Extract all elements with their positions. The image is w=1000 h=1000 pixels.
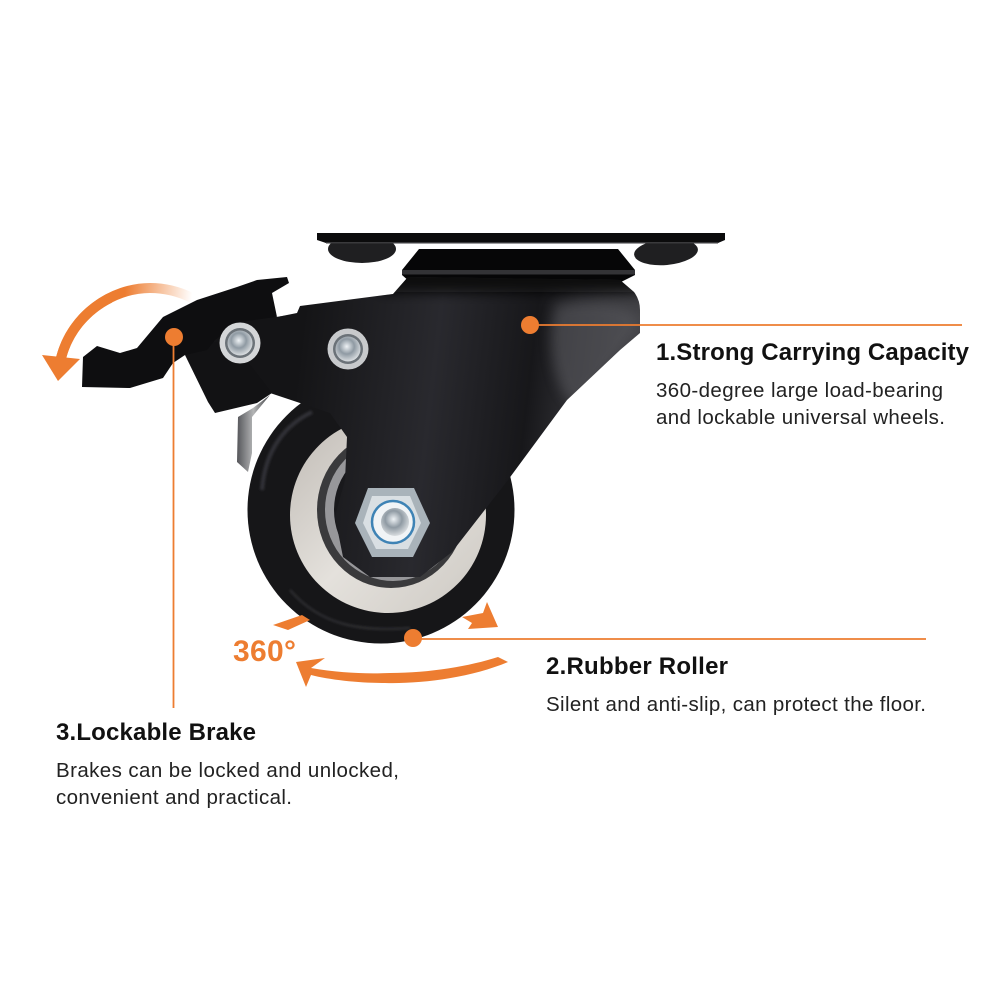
text block 3: Brakes can be locked and unlocked,: [56, 759, 399, 782]
fork highlight: [551, 302, 640, 405]
callout line 2: [404, 629, 926, 647]
arrow: swivel upper right: [462, 602, 498, 629]
arrow: brake swing: [42, 288, 192, 381]
mounting plate: [317, 233, 725, 268]
rivet left: [220, 322, 260, 364]
text block 1: [656, 339, 970, 429]
rubber wheel: [248, 376, 514, 644]
brake lever: [82, 277, 290, 388]
text block 2: 2.Rubber Roller: [546, 653, 728, 680]
callout line 3: [165, 328, 183, 708]
arrow: swivel upper left: [273, 615, 310, 630]
label: 360 degrees: 360°: [233, 635, 296, 668]
swivel bearing: [402, 249, 635, 282]
brake tab: [237, 395, 270, 472]
text block 1: 360-degree large load-bearing: [656, 379, 943, 402]
text block 2: Silent and anti-slip, can protect the floor.: [546, 693, 926, 716]
text block 1: and lockable universal wheels.: [656, 406, 945, 429]
callout line 1: [521, 316, 962, 334]
brake wedge: [185, 340, 272, 413]
text block 1: 1.Strong Carrying Capacity: [656, 339, 970, 366]
caster wheel illustration: [82, 233, 725, 644]
text block 3: 3.Lockable Brake: [56, 719, 256, 746]
fork body: [214, 277, 640, 577]
text block 2: [546, 653, 926, 716]
axle nut: [355, 488, 430, 557]
text block 3: convenient and practical.: [56, 786, 292, 809]
rivet right: [328, 328, 368, 370]
text block 3: [56, 719, 399, 809]
silver hub: [290, 417, 486, 613]
arrow: swivel lower: [296, 657, 508, 687]
